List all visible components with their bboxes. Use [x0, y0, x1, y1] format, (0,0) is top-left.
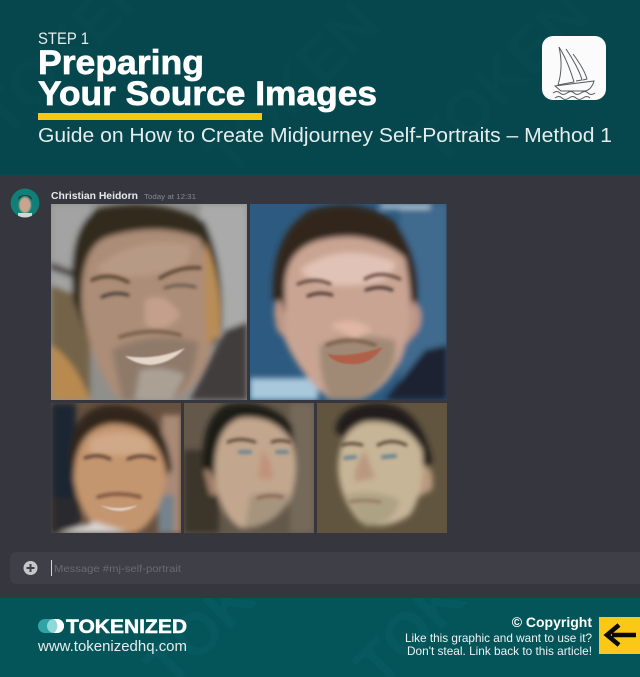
username and timestamp: Today at 12:31 [144, 192, 196, 201]
photo: group selfie [51, 403, 181, 533]
chat panel [0, 175, 640, 598]
website: www.tokenizedhq.com [37, 638, 187, 655]
copyright notice: Like this graphic and want to use it? [405, 631, 592, 645]
logo: Tokenized: TOKENIZED [66, 617, 187, 638]
title: Your Source Images [38, 75, 377, 113]
footer band [0, 598, 640, 677]
title underline [38, 113, 262, 120]
copyright notice: Don't steal. Link back to this article! [407, 644, 592, 658]
message input bar: Message #mj-self-portrait [54, 563, 181, 575]
copyright notice [405, 614, 592, 658]
photo: selfie on the beach [51, 204, 247, 400]
avatar [10, 188, 40, 219]
photo: three-quarter portrait facing left [317, 403, 447, 533]
header band [0, 0, 640, 190]
username and timestamp: Christian Heidorn [51, 190, 138, 202]
photo: smiling portrait against blue sky [250, 204, 447, 400]
icon: Midjourney sailboat [542, 36, 606, 100]
subtitle: Guide on How to Create Midjourney Self-Portraits – Method 1 [38, 125, 612, 147]
arrow badge [599, 617, 640, 654]
photo: three-quarter portrait facing right [184, 403, 314, 533]
title [38, 44, 377, 113]
username and timestamp [51, 190, 196, 202]
message input bar [10, 552, 640, 584]
copyright notice: © Copyright [512, 614, 592, 630]
step label: STEP 1 [38, 29, 89, 48]
title: Preparing [38, 44, 204, 82]
icon: plus button [24, 561, 38, 575]
